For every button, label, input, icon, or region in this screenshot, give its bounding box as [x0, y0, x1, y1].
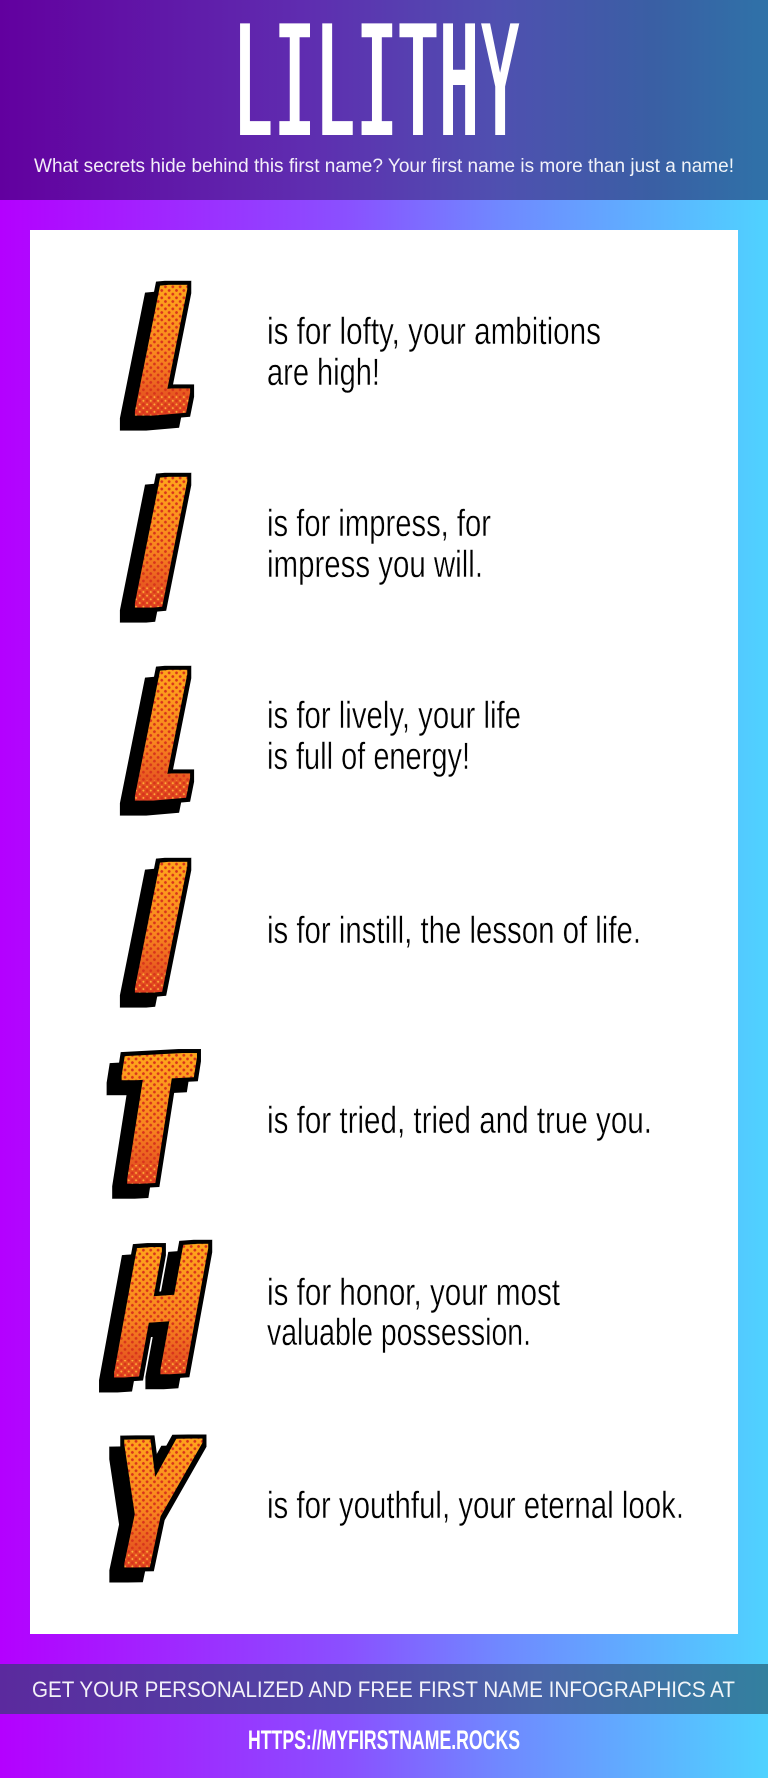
text: lively: is full of energy!: [267, 736, 470, 778]
row: letter I, instill: [100, 823, 641, 1030]
icon: comic letter H: [99, 1240, 212, 1392]
icon: comic letter T: T: [105, 1016, 197, 1222]
text: lofty: [267, 311, 601, 394]
text: tried: is for tried, tried and true you.: [267, 1100, 652, 1142]
row: letter L, lofty: [100, 244, 601, 453]
subtitle: What secrets hide behind this first name? Your first name is more than just a name!: [34, 155, 734, 177]
panel: white letters panel: [30, 230, 738, 1634]
row: letter H, honor: [99, 1240, 560, 1392]
icon: comic letter I: [120, 858, 192, 1008]
text: impress: [267, 503, 491, 586]
icon: comic letter H: H: [105, 1206, 218, 1415]
icon: comic letter L: L: [132, 244, 212, 453]
icon: comic letter I: I: [132, 438, 191, 645]
text: lively: [267, 695, 521, 778]
text: impress: impress you will.: [267, 544, 483, 586]
text: honor: valuable possession.: [267, 1312, 531, 1354]
row: letter T, tried: [80, 1016, 652, 1222]
text: lofty: are high!: [267, 352, 380, 394]
row: letter L, lively: [100, 629, 521, 838]
text: impress: is for impress, for: [267, 503, 491, 545]
row: letter Y, youthful: [109, 1434, 682, 1582]
icon: comic letter Y: Y: [93, 1402, 207, 1605]
text: lofty: is for lofty, your ambitions: [267, 311, 601, 353]
text: honor: is for honor, your most: [267, 1272, 560, 1314]
icon: comic letter T: [106, 1049, 201, 1199]
footer band: [0, 1664, 768, 1714]
icon: comic letter L: [120, 666, 194, 816]
icon: comic letter L: L: [132, 629, 212, 838]
icon: comic letter Y: [109, 1434, 207, 1582]
icon: comic letter L: [120, 280, 194, 431]
text: instill: is for instill, the lesson of life.: [267, 910, 641, 952]
text: lively: is for lively, your life: [267, 695, 521, 737]
icon: comic letter I: [120, 472, 192, 623]
text: honor: [267, 1272, 560, 1354]
header band: [0, 0, 768, 200]
row: letter I, impress: [100, 438, 491, 645]
footer url: HTTPS://MYFIRSTNAME.ROCKS: [248, 1725, 520, 1755]
icon: comic letter I: I: [132, 823, 191, 1030]
